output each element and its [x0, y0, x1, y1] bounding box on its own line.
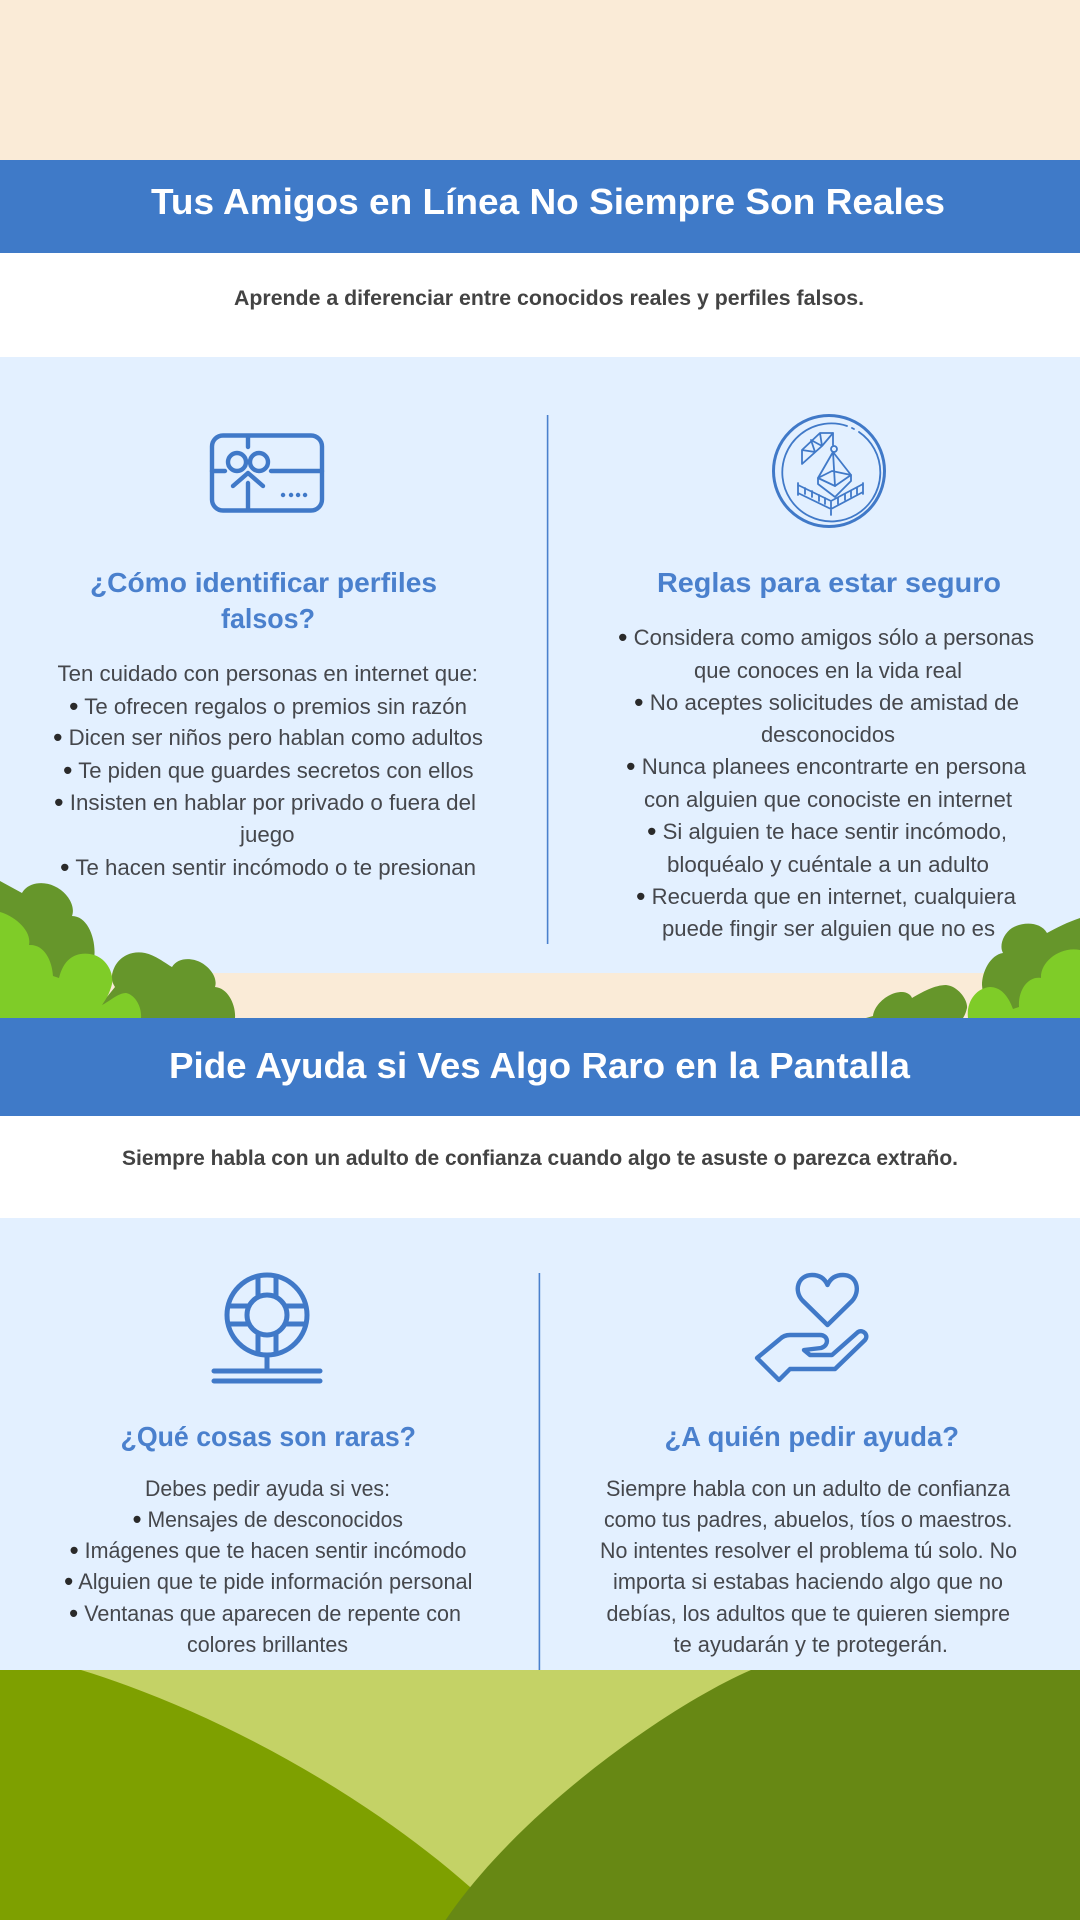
text block: warning signs: Insisten en hablar por privado o fuera del	[64, 790, 476, 815]
text block: warning signs: •	[53, 722, 63, 752]
text block: trusted adults: te ayudarán y te protegerán.	[674, 1632, 948, 1657]
text block: safety rules	[618, 622, 1034, 941]
heading: ¿Cómo identificar perfiles	[90, 567, 437, 598]
bushes: left	[0, 881, 235, 1018]
hills	[0, 1670, 1080, 1920]
text block: warning signs: •	[63, 756, 72, 786]
text block: strange things: •	[69, 1598, 78, 1628]
text block: safety rules: Si alguien te hace sentir incómodo,	[657, 819, 1007, 844]
heading: ¿Qué cosas son raras?	[120, 1421, 416, 1452]
icon: hand with heart	[757, 1275, 866, 1380]
text block: trusted adults: como tus padres, abuelos, tíos o maestros.	[604, 1507, 1012, 1532]
heading: Reglas para estar seguro	[657, 567, 1001, 598]
text block: trusted adults: debías, los adultos que te quieren siempre	[606, 1601, 1010, 1626]
text block: strange things: •	[64, 1566, 73, 1596]
text block: strange things: Debes pedir ayuda si ves:	[145, 1476, 390, 1501]
bushes: right	[866, 918, 1080, 1018]
section 2 title band	[0, 1018, 1080, 1116]
text block: strange things: Alguien que te pide información personal	[73, 1569, 473, 1594]
section 1 title band	[0, 160, 1080, 253]
text block: strange things	[64, 1476, 472, 1657]
text block: trusted adults: importa si estabas haciendo algo que no	[613, 1569, 1003, 1594]
section 1 subtitle band	[0, 253, 1080, 357]
icon: crane badge	[774, 416, 884, 526]
text block: strange things: Imágenes que te hacen sentir incómodo	[79, 1538, 466, 1563]
top beige banner	[0, 0, 1080, 160]
text block: safety rules: Recuerda que en internet, cualquiera	[646, 884, 1017, 909]
panel: section 2 background	[0, 1218, 1080, 1670]
text block: safety rules: •	[626, 752, 636, 782]
panel: a quién pedir ayuda	[600, 1275, 1017, 1657]
text block: trusted adults	[600, 1476, 1017, 1657]
divider section 2	[539, 1273, 540, 1670]
text block: warning signs: juego	[239, 822, 294, 847]
text block: safety rules: •	[618, 622, 627, 652]
panel: section 1 background	[0, 357, 1080, 973]
text block: trusted adults: No intentes resolver el problema tú solo. No	[600, 1538, 1017, 1563]
text block: safety rules: •	[636, 882, 646, 912]
panel: qué cosas son raras	[64, 1275, 472, 1657]
beige strip	[0, 973, 1080, 1018]
text block: strange things: Ventanas que aparecen de repente con	[78, 1601, 461, 1626]
icon: lifebuoy	[214, 1275, 320, 1381]
subtitle: Siempre habla con un adulto de confianza cuando algo te asuste o parezca extraño.	[122, 1147, 958, 1170]
panel: cómo identificar perfiles falsos	[53, 436, 483, 882]
text block: warning signs: Ten cuidado con personas en internet que:	[58, 661, 478, 686]
text block: strange things: •	[132, 1504, 142, 1534]
text block: warning signs: •	[69, 692, 79, 722]
text block: safety rules: con alguien que conociste en internet	[644, 787, 1012, 812]
text block: warning signs: Te piden que guardes secretos con ellos	[72, 758, 474, 783]
text block: safety rules: bloquéalo y cuéntale a un adulto	[667, 852, 989, 877]
text block: safety rules: que conoces en la vida real	[694, 658, 962, 683]
text block: warning signs: •	[54, 788, 64, 818]
panel: reglas para estar seguro	[618, 416, 1034, 941]
text block: warning signs: Te hacen sentir incómodo o te presionan	[70, 855, 476, 880]
text block: warning signs: Dicen ser niños pero hablan como adultos	[63, 725, 483, 750]
title: Tus Amigos en Línea No Siempre Son Reales	[151, 181, 945, 222]
icon: gift card	[212, 436, 322, 510]
divider section 1	[547, 415, 548, 944]
text block: safety rules: •	[634, 688, 644, 718]
section 2 subtitle band	[0, 1116, 1080, 1218]
text block: warning signs: •	[60, 852, 70, 882]
text block: strange things: Mensajes de desconocidos	[142, 1507, 403, 1532]
heading	[90, 567, 437, 634]
text block: warning signs	[53, 661, 483, 882]
text block: warning signs: Te ofrecen regalos o premios sin razón	[79, 694, 467, 719]
title: Pide Ayuda si Ves Algo Raro en la Pantalla	[169, 1045, 911, 1086]
text block: safety rules: •	[647, 816, 657, 846]
text block: strange things: •	[70, 1536, 79, 1566]
text block: safety rules: Nunca planees encontrarte en persona	[636, 754, 1027, 779]
text block: safety rules: desconocidos	[761, 722, 895, 747]
text block: trusted adults: Siempre habla con un adulto de confianza	[606, 1476, 1011, 1501]
text block: safety rules: Considera como amigos sólo a personas	[627, 625, 1034, 650]
text block: strange things: colores brillantes	[187, 1632, 348, 1657]
text block: safety rules: No aceptes solicitudes de amistad de	[644, 690, 1019, 715]
heading: falsos?	[221, 603, 315, 634]
subtitle: Aprende a diferenciar entre conocidos reales y perfiles falsos.	[234, 287, 864, 310]
text block: safety rules: puede fingir ser alguien que no es	[662, 916, 995, 941]
heading: ¿A quién pedir ayuda?	[664, 1421, 959, 1452]
